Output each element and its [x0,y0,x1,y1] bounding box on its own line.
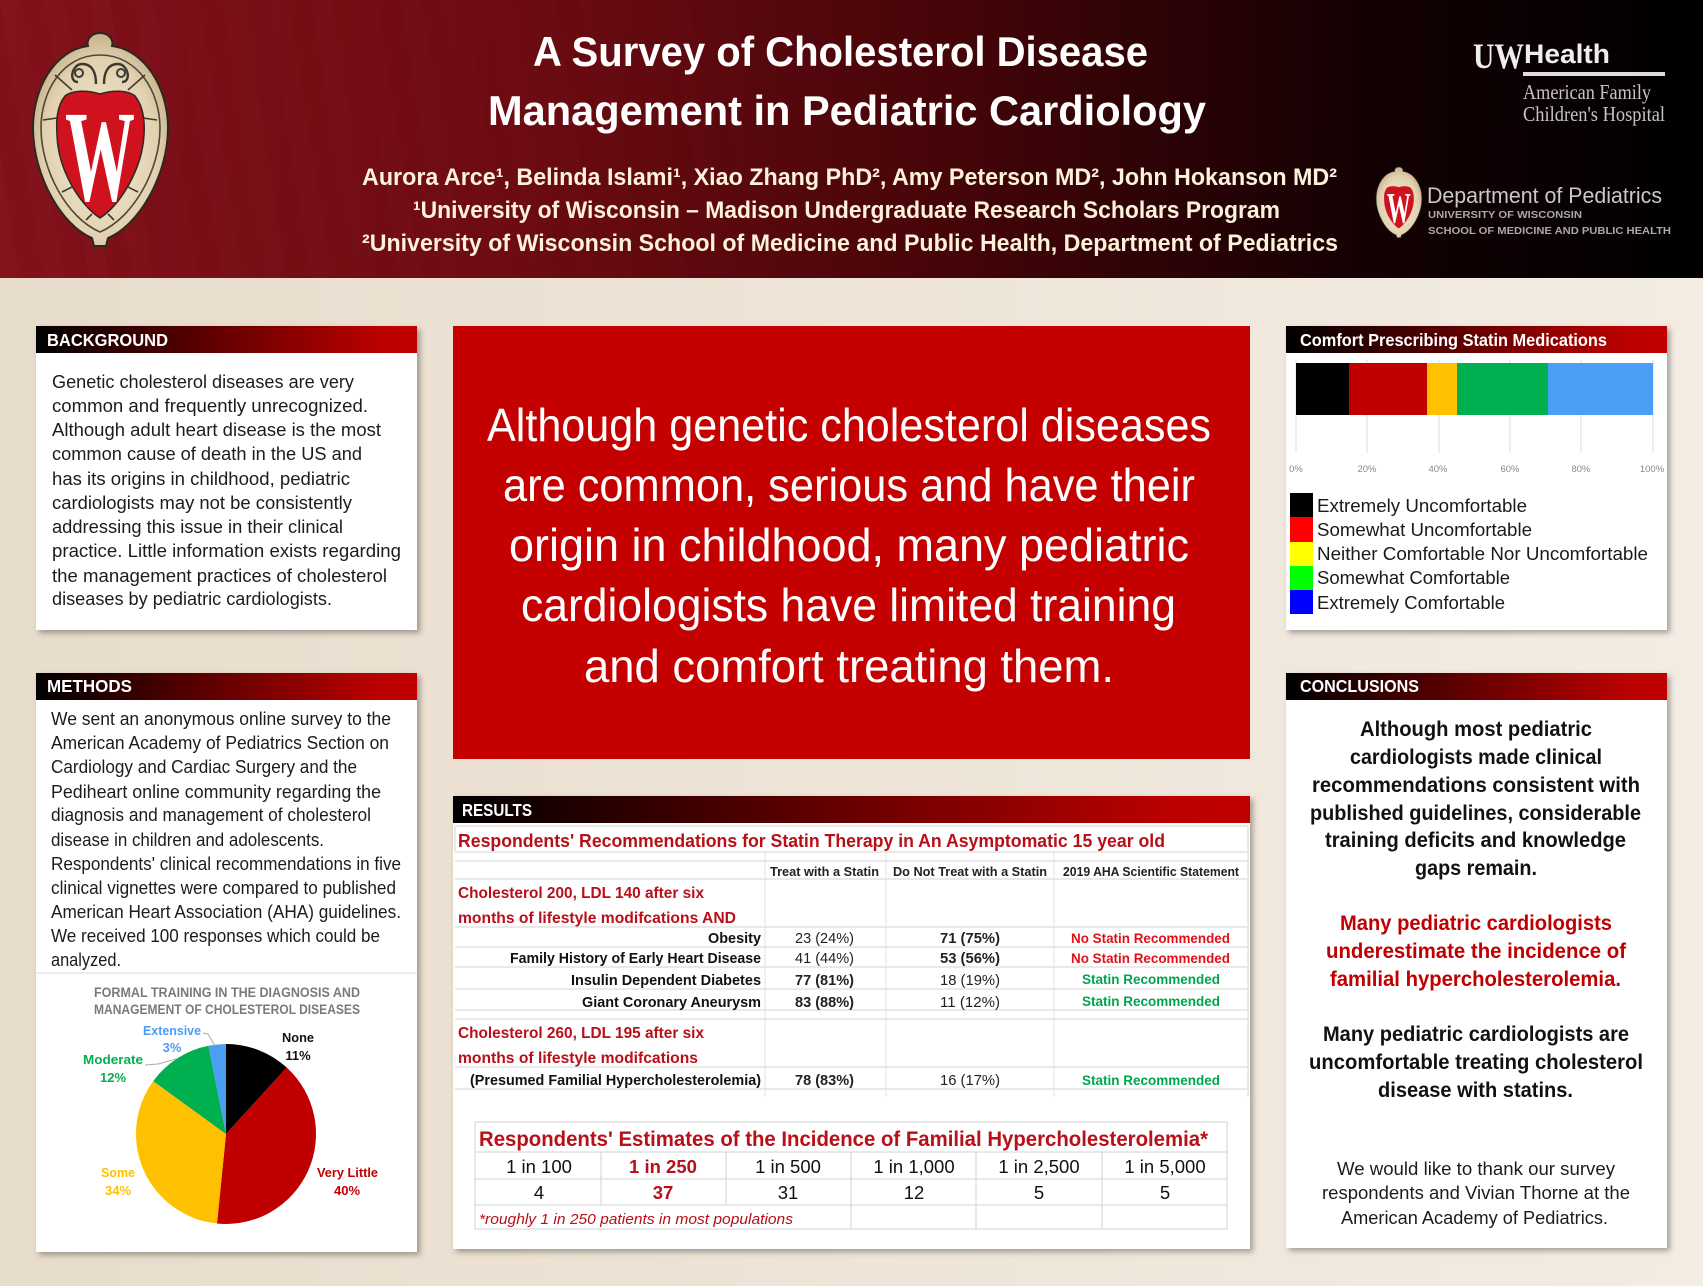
pie labels [83,1023,378,1198]
text: conclusion one [1310,718,1641,880]
pie labels: 11% [285,1048,311,1063]
table: statin recommendations: Cholesterol 200, LDL 140 after six [458,885,704,902]
text: methods body: diagnosis and management of cholesterol [51,805,371,825]
text: conclusion one: training deficits and knowledge [1325,829,1626,852]
callout: key message: cardiologists have limited training [521,579,1176,631]
table: statin recommendations: Treat with a Statin [770,865,879,879]
title: Management in Pediatric Cardiology [488,87,1207,134]
pie labels: Some [101,1165,135,1180]
text: conclusion two [1326,912,1627,991]
logo: UW Health American Family Children's Hospital: Children's Hospital [1523,102,1665,126]
text: methods body: We sent an anonymous online survey to the [51,709,391,729]
legend: Somewhat Comfortable [1317,567,1510,588]
chart title: FORMAL TRAINING IN THE DIAGNOSIS AND [94,985,360,1000]
text: background body: addressing this issue in their clinical [52,517,343,537]
title: A Survey of Cholesterol Disease [533,28,1148,75]
pie chart: formal training [83,985,378,1224]
table: statin recommendations: 53 (56%) [940,950,1000,967]
table: statin recommendations: 77 (81%) [795,972,854,989]
callout: key message: and comfort treating them. [584,640,1114,692]
table: incidence estimates [475,1122,1227,1229]
text: background body [52,372,401,609]
text: methods body: Respondents' clinical recommendations in five [51,854,401,874]
table: incidence estimates: 31 [778,1182,798,1203]
table: statin recommendations: Do Not Treat with a Statin [893,865,1047,879]
table: statin recommendations: (Presumed Familial Hypercholesterolemia) [470,1072,761,1089]
stacked bar chart: 80% [1571,464,1591,475]
pie labels: 3% [163,1040,182,1055]
table: incidence estimates: 1 in 100 [506,1156,572,1177]
text: methods body: clinical vignettes were compared to published [51,878,396,898]
table: statin recommendations: 23 (24%) [795,930,854,947]
table: statin recommendations: 71 (75%) [940,930,1000,947]
text: conclusion three: Many pediatric cardiologists are [1323,1023,1629,1046]
table: statin recommendations: 78 (83%) [795,1072,854,1089]
panel: conclusions [1286,673,1667,1248]
table: statin recommendations: Statin Recommended [1082,1072,1220,1088]
logo: Department of Pediatrics [1376,167,1671,238]
text: conclusion three [1309,1023,1643,1102]
table: statin recommendations: 2019 AHA Scientific Statement [1063,865,1240,879]
authors and affiliations [362,164,1338,257]
text: background body: common cause of death in the US and [52,444,362,464]
table: statin recommendations: Statin Recommended [1082,993,1220,1009]
logo: Department of Pediatrics: W [1387,185,1411,232]
panel: comfort prescribing statin medications [1286,326,1667,630]
table: statin recommendations: Statin Recommended [1082,971,1220,987]
text: conclusion one: gaps remain. [1415,857,1537,880]
authors and affiliations: ¹University of Wisconsin – Madison Undergraduate Research Scholars Program [413,197,1280,224]
stacked bar chart: 60% [1500,464,1520,475]
text: methods body: Cardiology and Cardiac Surgery and the [51,757,357,777]
heading: methods: METHODS [47,676,132,696]
table: incidence estimates: 1 in 1,000 [873,1156,955,1177]
table: statin recommendations: Cholesterol 260, LDL 195 after six [458,1025,704,1042]
icon: UW crest: W [65,85,135,229]
text: conclusion one: published guidelines, considerable [1310,802,1641,825]
panel: results [453,796,1250,1249]
text: conclusion three: uncomfortable treating cholesterol [1309,1051,1643,1074]
text: conclusion one: Although most pediatric [1360,718,1592,741]
table: statin recommendations: 41 (44%) [795,950,854,967]
table: statin recommendations: Respondents' Recommendations for Statin Therapy in An Asymptomatic 15 year old [458,831,1165,851]
table: incidence estimates: *roughly 1 in 250 patients in most populations [479,1211,794,1228]
table: statin recommendations: 83 (88%) [795,994,854,1011]
text: conclusion two: underestimate the incidence of [1326,940,1627,963]
heading: comfort: Comfort Prescribing Statin Medications [1300,330,1607,350]
heading: background: BACKGROUND [47,330,168,350]
logo: UW Health American Family Children's Hospital: UW [1473,36,1524,76]
text: methods body: American Academy of Pediatrics Section on [51,733,389,753]
heading: results: RESULTS [462,800,532,820]
legend [1290,493,1648,614]
icon: UW crest [33,33,168,246]
table: incidence estimates: 1 in 500 [755,1156,821,1177]
text: acknowledgements: We would like to thank our survey [1337,1159,1615,1179]
text: conclusion two: Many pediatric cardiologists [1340,912,1612,935]
table: incidence estimates: 1 in 2,500 [998,1156,1080,1177]
stacked bar chart: 20% [1357,464,1377,475]
table: statin recommendations: months of lifestyle modifcations [458,1050,698,1067]
text: background body: practice. Little information exists regarding [52,541,401,561]
table: incidence estimates: 5 [1160,1182,1170,1203]
logo: Department of Pediatrics: SCHOOL OF MEDICINE AND PUBLIC HEALTH [1428,225,1671,237]
panel: methods [36,673,417,1252]
pie labels: Moderate [83,1052,143,1067]
text: methods body: analyzed. [51,950,121,970]
stacked bar chart: 0% [1289,464,1303,475]
table: statin recommendations: Family History of Early Heart Disease [510,950,761,967]
text: background body: Genetic cholesterol diseases are very [52,372,354,392]
table: statin recommendations: 11 (12%) [940,994,1000,1011]
table: incidence estimates: 12 [904,1182,924,1203]
table: statin recommendations: months of lifestyle modifcations AND [458,910,736,927]
authors and affiliations: ²University of Wisconsin School of Medicine and Public Health, Department of Pediatrics [362,230,1338,257]
pie labels: 40% [334,1183,360,1198]
logo: Department of Pediatrics: Department of Pediatrics [1427,183,1662,208]
panel: background [36,326,417,630]
pie labels: 34% [105,1183,131,1198]
logo: Department of Pediatrics: UNIVERSITY OF WISCONSIN [1428,209,1582,221]
chart title [94,985,360,1017]
text: methods body: disease in children and adolescents. [51,830,324,850]
table: incidence estimates: Respondents' Estimates of the Incidence of Familial Hypercholesterolemia* [479,1128,1209,1151]
text: methods body: American Heart Association (AHA) guidelines. [51,902,401,922]
table: statin recommendations: No Statin Recommended [1071,930,1230,946]
pie labels: 12% [100,1070,126,1085]
title [488,28,1207,134]
authors and affiliations: Aurora Arce¹, Belinda Islami¹, Xiao Zhang PhD², Amy Peterson MD², John Hokanson MD² [362,164,1337,191]
callout: key message: Although genetic cholesterol diseases [487,399,1211,451]
callout: key message: are common, serious and have their [503,459,1195,511]
heading: conclusions: CONCLUSIONS [1300,676,1419,696]
text: conclusion one: cardiologists made clinical [1350,746,1602,769]
text: acknowledgements [1322,1159,1630,1228]
text: acknowledgements: respondents and Vivian Thorne at the [1322,1183,1630,1203]
header banner [0,0,1703,278]
table: incidence estimates: 5 [1034,1182,1044,1203]
pie slices [136,1044,316,1224]
text: background body: cardiologists may not be consistently [52,493,352,513]
pie labels: None [282,1030,314,1045]
table: statin recommendations: No Statin Recommended [1071,950,1230,966]
callout: key message: origin in childhood, many pediatric [509,519,1189,571]
text: conclusion two: familial hypercholesterolemia. [1330,968,1621,991]
table: incidence estimates: 1 in 250 [629,1156,697,1177]
table: statin recommendations: 18 (19%) [940,972,1000,989]
table: statin recommendations: Obesity [708,930,762,947]
logo: UW Health American Family Children's Hospital: American Family [1523,80,1651,104]
text: background body: common and frequently unrecognized. [52,396,368,416]
table: incidence estimates: 37 [653,1182,673,1203]
callout: key message [453,326,1250,759]
table: incidence estimates: 4 [534,1182,544,1203]
table: statin recommendations: Giant Coronary Aneurysm [582,994,761,1011]
table: statin recommendations [455,826,1248,1097]
legend: Neither Comfortable Nor Uncomfortable [1317,543,1648,564]
legend: Extremely Uncomfortable [1317,495,1527,516]
stacked bar chart: 40% [1428,464,1448,475]
pie labels: Extensive [143,1023,201,1038]
stacked bar chart: 100% [1640,464,1665,475]
logo: UW Health American Family Children's Hospital: Health [1524,39,1610,69]
table: statin recommendations: Insulin Dependent Diabetes [571,972,761,989]
text: conclusion one: recommendations consistent with [1312,774,1640,797]
table: statin recommendations: 16 (17%) [940,1072,1000,1089]
text: conclusion three: disease with statins. [1378,1079,1573,1102]
legend: Extremely Comfortable [1317,592,1505,613]
logo: UW Health American Family Children's Hospital [1473,36,1665,126]
pie labels: Very Little [317,1165,378,1180]
text: methods body: Pediheart online community regarding the [51,782,381,802]
legend: Somewhat Uncomfortable [1317,519,1532,540]
chart title: MANAGEMENT OF CHOLESTEROL DISEASES [94,1002,360,1017]
table: incidence estimates: 1 in 5,000 [1124,1156,1206,1177]
text: methods body: We received 100 responses which could be [51,926,380,946]
text: acknowledgements: American Academy of Pediatrics. [1341,1208,1608,1228]
text: background body: the management practices of cholesterol [52,566,387,586]
stacked bar chart [1289,360,1665,475]
text: background body: diseases by pediatric cardiologists. [52,589,332,609]
text: methods body [51,709,401,970]
text: background body: Although adult heart disease is the most [52,420,381,440]
text: background body: has its origins in childhood, pediatric [52,469,350,489]
